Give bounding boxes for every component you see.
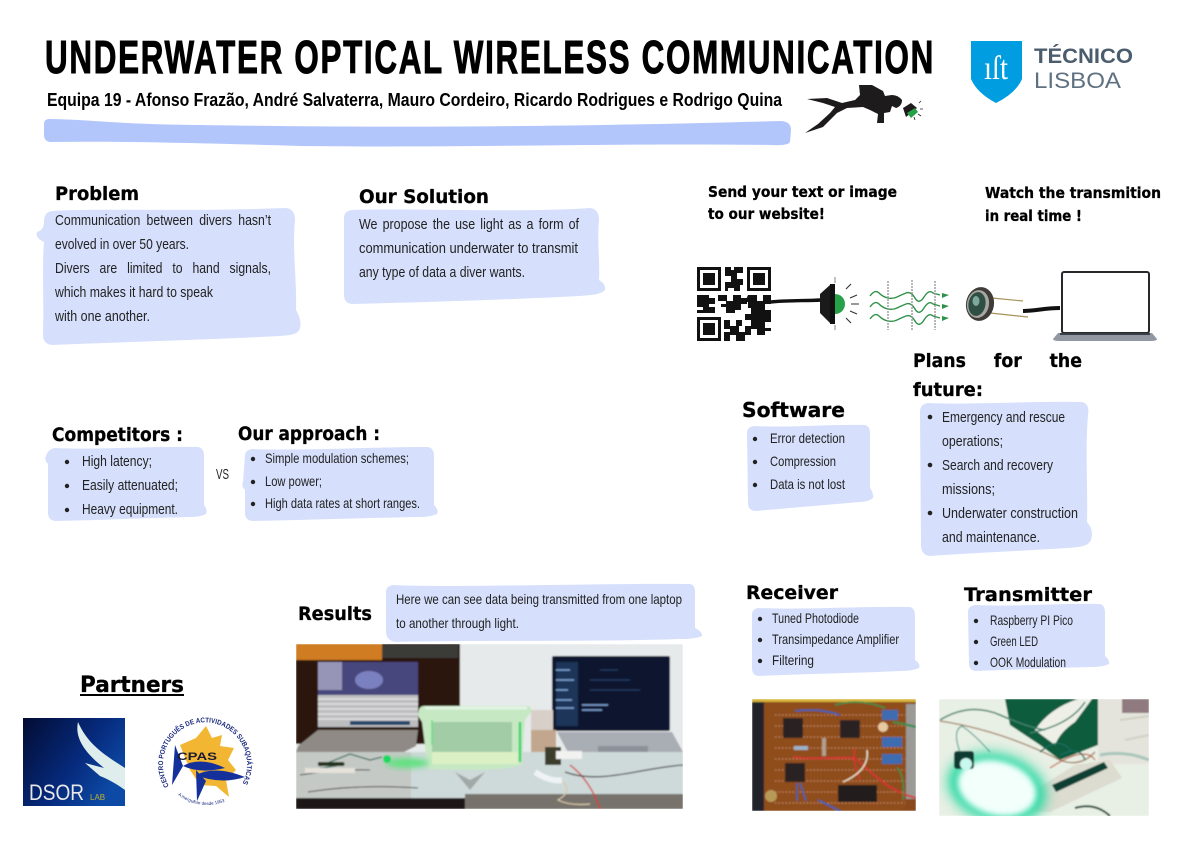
competitors list xyxy=(65,453,178,518)
plans list: missions; xyxy=(942,481,995,498)
software list: Data is not lost xyxy=(770,476,845,492)
plans list: Search and recovery xyxy=(942,457,1053,474)
problem text: with one another. xyxy=(54,308,150,325)
icon: laptop xyxy=(1053,272,1157,341)
solution text: We propose the use light as a form of xyxy=(359,216,580,233)
logo: DSOR lab xyxy=(23,718,125,806)
heading: software: Software xyxy=(742,398,845,422)
logo: Técnico Lisboa: TÉCNICO xyxy=(1034,45,1133,68)
call to action: watch: Watch the transmition xyxy=(985,184,1161,202)
receiver list: Transimpedance Amplifier xyxy=(772,631,899,647)
logo: CPAS: A mergulhar desde 1953 xyxy=(178,793,224,805)
software list: Error detection xyxy=(770,430,845,446)
plans list xyxy=(928,409,1078,546)
heading: our solution: Our Solution xyxy=(359,186,489,208)
heading: problem: Problem xyxy=(55,183,139,205)
panel: results caption xyxy=(386,584,702,642)
logo: CPAS: CPAS xyxy=(177,751,217,763)
competitors list: Easily attenuated; xyxy=(82,477,178,494)
panel: plans for the future xyxy=(913,350,1092,556)
approach list: Low power; xyxy=(265,473,322,489)
panel: our approach xyxy=(238,423,438,521)
icon: diver with light xyxy=(805,85,923,133)
heading: plans for the future: future: xyxy=(913,379,983,401)
panel: software xyxy=(742,398,873,511)
plans list: Emergency and rescue xyxy=(942,409,1065,426)
cable xyxy=(771,300,821,302)
heading: plans for the future xyxy=(913,350,1082,401)
team subtitle: Equipa 19 - Afonso Frazão, André Salvaterra, Mauro Cordeiro, Ricardo Rodrigues e Rodrigo Quina xyxy=(47,90,783,110)
plans list: operations; xyxy=(942,433,1003,450)
software list: Compression xyxy=(770,453,836,469)
problem text: Divers are limited to hand signals, xyxy=(55,260,271,277)
solution text xyxy=(359,216,580,281)
panel: competitors xyxy=(45,424,207,521)
solution text: any type of data a diver wants. xyxy=(359,264,525,281)
competitors list: Heavy equipment. xyxy=(82,501,178,518)
photo: experimental setup xyxy=(296,644,683,809)
software list xyxy=(753,430,845,492)
receiver list: Filtering xyxy=(772,652,814,668)
heading: competitors: Competitors : xyxy=(52,424,183,446)
plans list: and maintenance. xyxy=(942,529,1040,546)
heading: receiver: Receiver xyxy=(746,582,839,604)
problem text xyxy=(54,212,272,325)
problem text: evolved in over 50 years. xyxy=(55,236,189,253)
heading: our approach: Our approach : xyxy=(238,423,380,445)
photo: receiver circuit board xyxy=(752,699,916,811)
approach list: Simple modulation schemes; xyxy=(265,450,409,466)
panel: receiver xyxy=(746,582,920,676)
call to action: watch: in real time ! xyxy=(985,207,1082,225)
icon: LED xyxy=(820,277,859,330)
versus label: VS xyxy=(216,466,229,483)
logo: DSOR lab: DSOR xyxy=(29,780,84,805)
heading underline brush stroke xyxy=(44,119,791,146)
competitors list: High latency; xyxy=(82,453,152,470)
heading: transmitter: Transmitter xyxy=(964,584,1093,606)
diagram: transmission chain xyxy=(697,267,1157,341)
icon: light waves xyxy=(870,280,949,330)
panel: results caption: Here we can see data being transmitted from one laptop xyxy=(396,591,682,607)
logo: Técnico Lisboa: ıſt xyxy=(984,50,1008,87)
heading: partners: Partners xyxy=(80,673,184,698)
call to action: send: to our website! xyxy=(708,205,825,223)
logo: Técnico Lisboa: LISBOA xyxy=(1034,68,1121,93)
photo: transmitter with green LED xyxy=(939,699,1149,816)
panel: our solution xyxy=(344,186,605,304)
call to action: send xyxy=(708,183,897,223)
approach list xyxy=(251,450,420,511)
transmitter list xyxy=(974,612,1073,670)
panel: problem xyxy=(37,183,301,345)
heading: plans for the future: Plans for the xyxy=(913,350,1082,372)
logo: DSOR lab: LAB xyxy=(90,793,105,802)
cable to laptop xyxy=(1023,308,1060,311)
panel: transmitter xyxy=(964,584,1109,671)
transmitter list: OOK Modulation xyxy=(990,654,1066,670)
problem text: Communication between divers hasn’t xyxy=(55,212,272,229)
call to action: watch xyxy=(985,184,1161,225)
receiver list: Tuned Photodiode xyxy=(772,610,859,626)
logo: CPAS: CENTRO PORTUGUÊS DE ACTIVIDADES SUBAQUÁTICAS xyxy=(158,718,254,788)
solution text: communication underwater to transmit xyxy=(359,240,579,257)
transmitter list: Raspberry PI Pico xyxy=(990,612,1073,628)
panel: results caption: to another through light. xyxy=(396,615,519,631)
heading: results: Results xyxy=(298,603,372,625)
transmitter list: Green LED xyxy=(990,633,1038,649)
approach list: High data rates at short ranges. xyxy=(265,495,420,511)
problem text: which makes it hard to speak xyxy=(54,284,213,301)
plans list: Underwater construction xyxy=(942,505,1078,522)
receiver list xyxy=(758,610,899,668)
logo: Técnico Lisboa xyxy=(971,41,1133,103)
icon: QR code xyxy=(697,267,771,341)
call to action: send: Send your text or image xyxy=(708,183,897,201)
icon: photodiode xyxy=(963,285,1028,323)
